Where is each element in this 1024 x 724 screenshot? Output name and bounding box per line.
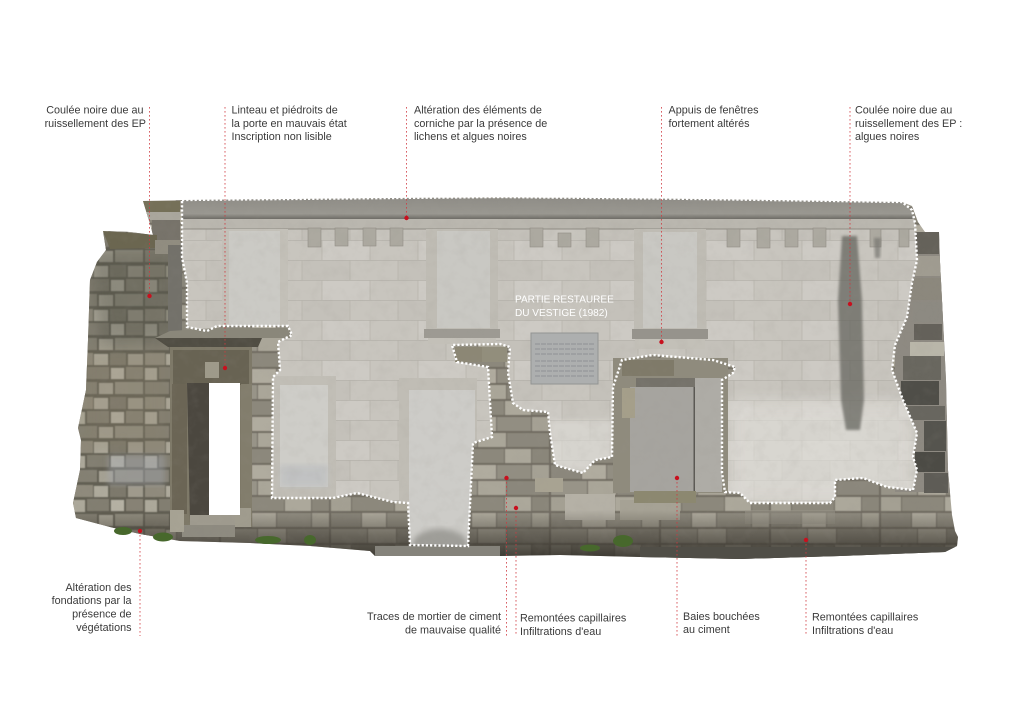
cornice brackets <box>308 228 909 248</box>
right quoin masonry <box>895 232 955 492</box>
secondary streak <box>874 238 881 258</box>
callout: fondations: végétations <box>76 622 132 634</box>
callout: appuis de fenêtres: Appuis de fenêtres <box>668 104 759 116</box>
callout: coulée noire droite <box>848 104 962 306</box>
restored masonry area <box>170 190 930 561</box>
plaque <box>531 333 598 384</box>
callout: coulée noire gauche <box>45 104 152 298</box>
callout: corniche <box>404 104 547 220</box>
restored area label <box>515 294 614 319</box>
callout: remontées capillaires droite <box>804 538 919 637</box>
tower pale blue stones <box>108 455 165 485</box>
right quoin blocks <box>899 232 948 493</box>
callout: baies bouchées <box>675 476 760 636</box>
door embrasure <box>187 383 209 518</box>
callout: mortier de ciment: de mauvaise qualité <box>405 624 501 636</box>
stones above the lower door notch <box>455 347 507 362</box>
steps <box>190 515 240 525</box>
tower cornice fragments <box>103 201 182 335</box>
black runoff streak <box>838 236 864 430</box>
callout: fondations <box>52 529 142 636</box>
callout: remontées capillaires centre <box>514 506 627 638</box>
callout: coulée noire droite: Coulée noire due au <box>855 104 952 116</box>
callout: remontées capillaires centre: Remontées capillaires <box>520 612 627 624</box>
callout: appuis de fenêtres <box>659 104 759 344</box>
tower upper dark weathering <box>88 250 180 345</box>
callout: linteau: Linteau et piédroits de <box>232 104 338 116</box>
door surround <box>170 347 252 527</box>
callout: baies bouchées: Baies bouchées <box>683 611 760 623</box>
pilaster base <box>235 508 251 527</box>
callout: remontées capillaires centre: Infiltrations d'eau <box>520 626 601 638</box>
lintel cornice <box>155 338 262 347</box>
callout: fondations: Altération des <box>65 582 132 594</box>
door opening <box>209 383 240 515</box>
callout: remontées capillaires droite: Remontées capillaires <box>812 612 919 624</box>
callout: baies bouchées: au ciment <box>683 624 730 636</box>
callout: coulée noire droite: ruissellement des EP : <box>855 118 962 130</box>
lower-left window frame <box>274 376 336 498</box>
ground paving <box>640 547 960 559</box>
top-left window <box>222 229 288 329</box>
left tower rubble masonry <box>73 228 170 536</box>
callout: corniche: lichens et algues noires <box>414 131 527 143</box>
restored area label: DU VESTIGE (1982) <box>515 308 608 319</box>
doorway <box>155 328 290 537</box>
grain texture <box>60 190 970 570</box>
lower door frame <box>399 378 477 503</box>
dark foot band <box>76 514 958 559</box>
callout: coulée noire gauche: ruissellement des EP <box>45 118 146 130</box>
vestige wall elevation <box>60 190 970 570</box>
callout: coulée noire gauche: Coulée noire due au <box>46 104 144 116</box>
callout: fondations: présence de <box>72 608 132 620</box>
callout: mortier de ciment: Traces de mortier de ciment <box>367 611 501 623</box>
callout: corniche: Altération des éléments de <box>414 104 542 116</box>
callout: linteau: la porte en mauvais état <box>232 118 347 130</box>
tower lower warm tone <box>82 354 168 448</box>
window sills <box>424 329 500 338</box>
callout: linteau: Inscription non lisible <box>232 131 332 143</box>
restored area label: PARTIE RESTAUREE <box>515 294 614 306</box>
lower wall pale courses <box>535 478 835 524</box>
cornice <box>170 198 930 219</box>
callout: fondations: fondations par la <box>52 595 132 607</box>
callout: coulée noire droite: algues noires <box>855 131 920 143</box>
vegetation <box>114 527 633 552</box>
pale lower plaster <box>728 400 915 505</box>
callout: remontées capillaires droite: Infiltrations d'eau <box>812 625 893 637</box>
callout: linteau <box>223 104 347 370</box>
dotted outline of restored area <box>182 197 917 546</box>
callout: appuis de fenêtres: fortement altérés <box>668 118 750 130</box>
top-right window <box>634 229 706 329</box>
callout: mortier de ciment <box>367 476 509 636</box>
old masonry base <box>60 190 970 570</box>
blocked window bay <box>613 358 728 503</box>
top-middle window <box>426 229 498 329</box>
callout: corniche: corniche par la présence de <box>414 118 547 130</box>
